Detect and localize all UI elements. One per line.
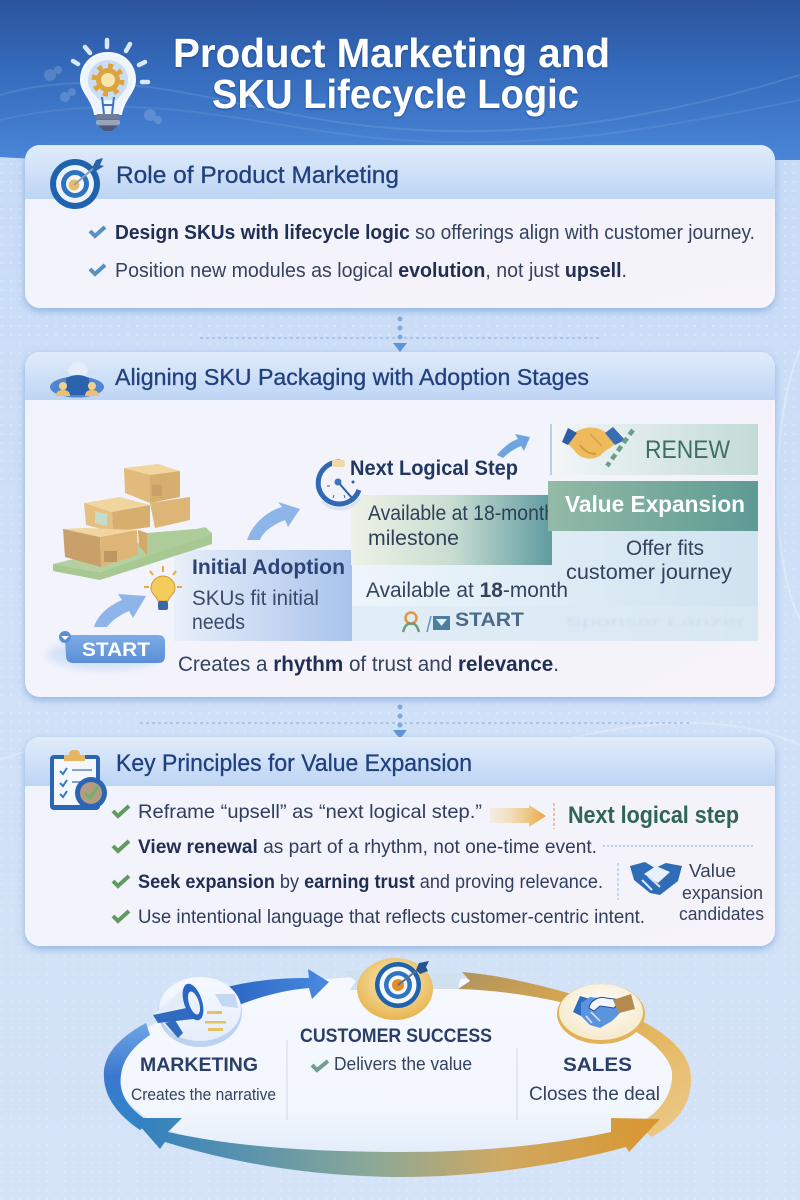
block: next step: milestone bbox=[368, 527, 459, 550]
arrow: right gold arc bbox=[458, 972, 691, 1137]
block: initial adoption: SKUs fit initial bbox=[192, 587, 319, 610]
divider lines bbox=[287, 1040, 517, 1120]
text: offer fits: Offer fits bbox=[626, 537, 704, 560]
block: value expansion: Value Expansion bbox=[565, 491, 745, 517]
arrow: top blue bbox=[227, 969, 329, 1005]
heading: next logical step: Next Logical Step bbox=[350, 456, 518, 480]
label: marketing: Creates the narrative bbox=[131, 1085, 276, 1104]
start badge bbox=[47, 631, 165, 670]
heading: Aligning SKU Packaging with Adoption Stages bbox=[115, 364, 589, 390]
block: value expansion bbox=[548, 481, 758, 531]
lower pale block bbox=[352, 531, 758, 641]
callout: next logical step: Next logical step bbox=[568, 802, 739, 829]
title: Product Marketing and bbox=[173, 30, 610, 76]
label: sales: Closes the deal bbox=[529, 1084, 660, 1105]
block: initial adoption: Initial Adoption bbox=[192, 555, 345, 579]
bullet 4: Use intentional language that reflects customer-centric intent. bbox=[138, 906, 645, 928]
text: available at 18-month: Available at 18-month bbox=[366, 579, 568, 602]
bullet 1: Reframe “upsell” as “next logical step.” bbox=[138, 801, 482, 823]
callout: value expansion candidates bbox=[618, 861, 764, 924]
panel: key principles bbox=[25, 737, 775, 946]
block: initial adoption: needs bbox=[192, 611, 245, 634]
label: sales: SALES bbox=[563, 1055, 632, 1076]
block: next step bbox=[351, 495, 555, 565]
icon: megaphone bbox=[153, 977, 242, 1047]
faint label: Sponsor Lanzer bbox=[565, 614, 746, 629]
panel: role of product marketing bbox=[25, 145, 775, 308]
bullet 1: Design SKUs with lifecycle logic so offerings align with customer journey. bbox=[115, 221, 755, 244]
icon: gold handshake bbox=[562, 427, 633, 466]
start row with icons bbox=[403, 610, 524, 632]
block: next step: Available at 18-month bbox=[368, 502, 555, 525]
caption: Creates a rhythm of trust and relevance. bbox=[178, 653, 559, 676]
start row with icons: START bbox=[455, 610, 524, 631]
arrow: connector 1 bbox=[200, 316, 600, 352]
callout: value expansion candidates: candidates bbox=[679, 904, 764, 924]
icon: team cloud bbox=[50, 362, 104, 398]
label: marketing: MARKETING bbox=[140, 1055, 258, 1076]
start badge: START bbox=[82, 640, 150, 661]
bullet 3: Seek expansion by earning trust and proving relevance. bbox=[138, 871, 603, 893]
header band bbox=[0, 0, 800, 162]
icon: clipboard bbox=[50, 750, 107, 810]
label: customer success: CUSTOMER SUCCESS bbox=[300, 1026, 492, 1047]
label: marketing bbox=[131, 1055, 276, 1104]
icon: target with dart bbox=[50, 158, 104, 209]
panel header band bbox=[25, 352, 775, 400]
block: renew bbox=[551, 424, 758, 475]
block: renew: RENEW bbox=[645, 436, 730, 464]
icon: stopwatch bbox=[318, 460, 360, 509]
label: customer success bbox=[300, 1026, 492, 1074]
heading: Key Principles for Value Expansion bbox=[116, 750, 472, 777]
arrow: left blue arc bbox=[104, 1023, 150, 1130]
bullet 2: Position new modules as logical evolution, not just upsell. bbox=[115, 259, 627, 282]
title bbox=[173, 30, 610, 117]
callout: value expansion candidates: Value bbox=[689, 861, 736, 881]
text: offer fits: customer journey bbox=[566, 561, 733, 584]
callout: value expansion candidates: expansion bbox=[682, 883, 763, 903]
icon: blue handshake bbox=[630, 862, 682, 895]
icon: stacked boxes bbox=[53, 464, 212, 580]
icon: small bulb bbox=[144, 566, 182, 610]
arrow: connector 2 bbox=[140, 704, 690, 739]
panel: aligning SKU packaging bbox=[25, 352, 775, 697]
icon: light bulb with gear bbox=[73, 40, 148, 131]
label: customer success: Delivers the value bbox=[334, 1053, 472, 1074]
panel header band bbox=[25, 145, 775, 199]
label: sales bbox=[529, 1055, 660, 1105]
cycle interior bbox=[115, 976, 679, 1170]
arrow: to renew bbox=[497, 434, 530, 458]
panel header band bbox=[25, 737, 775, 786]
heading: Role of Product Marketing bbox=[116, 162, 399, 189]
arrow: bottom double-headed bbox=[133, 1118, 660, 1177]
cycle diagram bbox=[104, 958, 691, 1177]
arrow: to next step bbox=[247, 502, 300, 540]
arrow: orange bbox=[490, 805, 546, 827]
bullet 2: View renewal as part of a rhythm, not one-time event. bbox=[138, 836, 597, 858]
block: initial adoption bbox=[174, 550, 352, 641]
icon: target bbox=[357, 958, 433, 1020]
faded band text bbox=[352, 606, 758, 641]
text: offer fits bbox=[566, 537, 733, 584]
icon: handshake bbox=[557, 984, 645, 1044]
arrow: start to initial adoption bbox=[94, 594, 146, 627]
title: SKU Lifecycle Logic bbox=[212, 71, 579, 117]
arrow: pale connectors bbox=[342, 971, 462, 990]
